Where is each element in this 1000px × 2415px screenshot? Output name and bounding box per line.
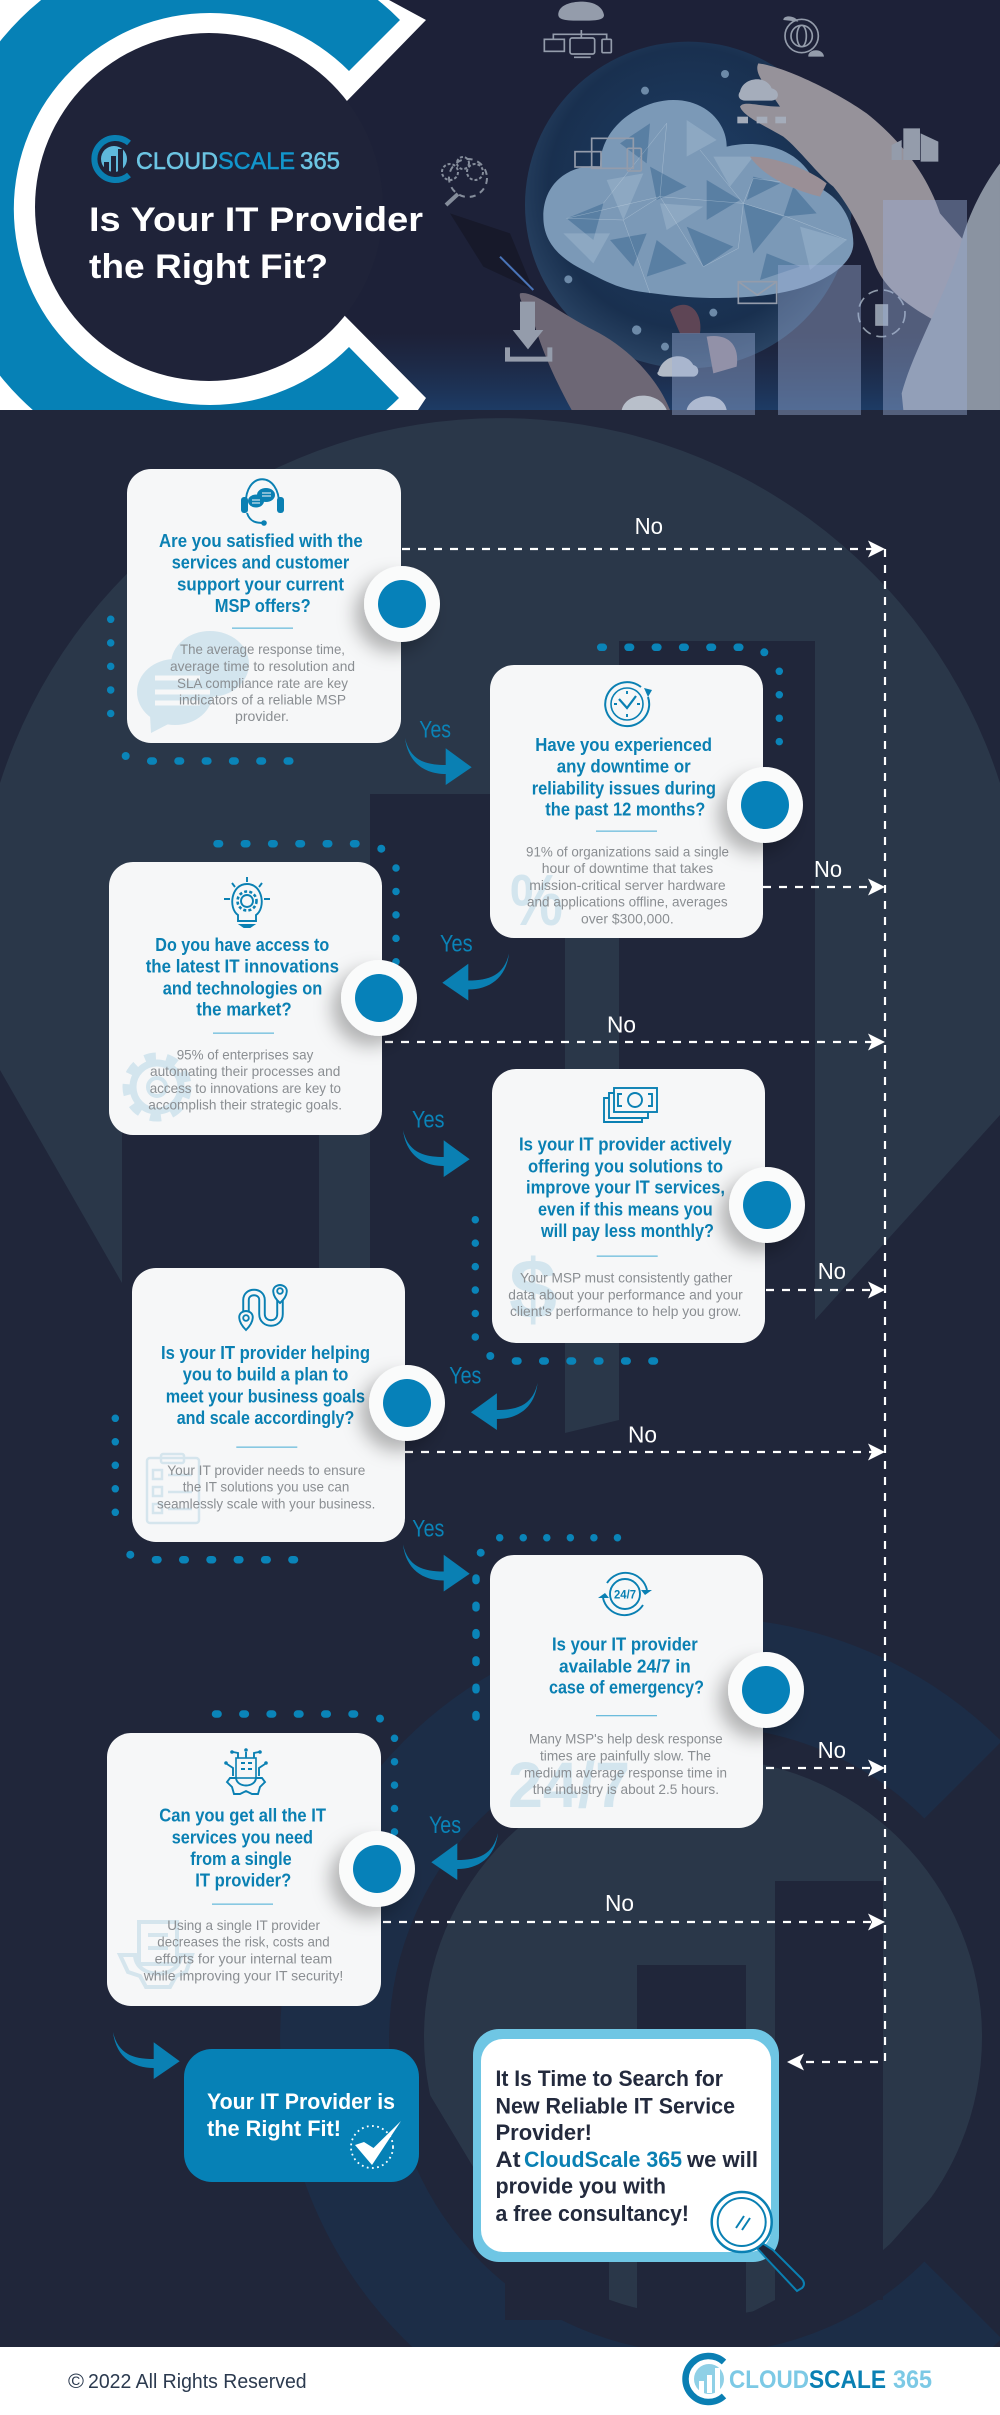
copyright: © xyxy=(68,2371,84,2393)
icon: 24/7 cycle: 24/7 xyxy=(614,1588,636,1602)
question text: IT provider? xyxy=(195,1871,291,1891)
header logo: CLOUD xyxy=(136,148,218,175)
yes arrow 4: Yes xyxy=(449,1362,481,1390)
yes arrow 5: Yes xyxy=(412,1516,444,1543)
supporting text: the IT solutions you use can xyxy=(183,1479,349,1495)
watermark icon: chat bubbles xyxy=(137,631,249,733)
outcome: search new provider: we will xyxy=(686,2147,758,2172)
decision node xyxy=(728,1652,804,1728)
question text: will pay less monthly? xyxy=(540,1221,714,1241)
no arrow 5: No xyxy=(628,1422,657,1448)
decision node xyxy=(727,767,803,843)
title xyxy=(89,201,423,286)
icon: check mark xyxy=(351,2121,401,2168)
icon: gears and magnifier xyxy=(442,157,487,205)
supporting text: accomplish their strategic goals. xyxy=(148,1097,342,1113)
dotted decoration 6 xyxy=(476,1538,618,1717)
header photo: cloud in hands xyxy=(380,2,1000,410)
panel: question 4 xyxy=(492,1069,805,1343)
icon: 24/7 cycle xyxy=(598,1573,652,1615)
panel: question 7 xyxy=(107,1733,415,2006)
question text: reliability issues during xyxy=(532,778,716,798)
supporting text: SLA compliance rate are key xyxy=(177,675,348,691)
no arrow 7: No xyxy=(605,1890,634,1916)
watermark: dollar: $ xyxy=(509,1242,557,1336)
watermark: percent: % xyxy=(510,861,563,941)
dotted decoration 5 xyxy=(115,1418,295,1560)
supporting text: medium average response time in xyxy=(524,1764,727,1780)
supporting text: and applications offline, averages xyxy=(527,894,728,910)
question text: support your current xyxy=(177,574,344,594)
question text: and technologies on xyxy=(163,978,322,998)
supporting text xyxy=(148,1046,342,1113)
copyright: 2022 All Rights Reserved xyxy=(88,2371,307,2393)
title: Is Your IT Provider xyxy=(89,201,423,239)
supporting text: Your MSP must consistently gather xyxy=(520,1270,733,1286)
header banner xyxy=(0,0,1000,410)
question text: Do you have access to xyxy=(155,935,329,955)
supporting text: while improving your IT security! xyxy=(143,1967,343,1983)
supporting text: hour of downtime that takes xyxy=(542,860,713,876)
no path: vertical dashed connector xyxy=(800,549,885,2062)
no arrow 2 xyxy=(763,856,885,896)
question text xyxy=(532,735,716,820)
supporting text: decreases the risk, costs and xyxy=(157,1934,330,1950)
outcome: right fit xyxy=(184,2049,419,2182)
question text: from a single xyxy=(190,1849,292,1869)
question text: Have you experienced xyxy=(535,735,712,755)
yes arrow 5 xyxy=(403,1516,470,1592)
question text: MSP offers? xyxy=(215,596,311,616)
yes arrow 6 xyxy=(429,1812,498,1880)
watermark icon: gear xyxy=(127,1057,187,1117)
icon: banknotes xyxy=(604,1088,657,1122)
no arrow 4: No xyxy=(818,1258,846,1284)
supporting text: seamlessly scale with your business. xyxy=(157,1496,375,1512)
question text: the past 12 months? xyxy=(545,800,705,820)
yes arrow 1 xyxy=(405,717,472,785)
supporting text xyxy=(170,641,355,724)
dotted decoration 3 xyxy=(217,844,396,962)
supporting text: indicators of a reliable MSP xyxy=(179,692,346,708)
question text: Can you get all the IT xyxy=(159,1806,326,1826)
supporting text: data about your performance and your xyxy=(508,1286,743,1302)
supporting text: over $300,000. xyxy=(581,910,674,926)
outcome: search new provider: New Reliable IT Service xyxy=(496,2093,735,2118)
question text xyxy=(159,531,363,616)
icon: clock xyxy=(605,682,652,726)
yes arrow 4 xyxy=(449,1362,538,1430)
no arrow 5 xyxy=(405,1422,885,1460)
icon: winding road xyxy=(239,1285,287,1330)
outcome: right fit: the Right Fit! xyxy=(207,2116,341,2141)
outcome: search new provider: At xyxy=(496,2147,521,2172)
supporting text xyxy=(157,1462,375,1512)
decision node xyxy=(364,566,440,642)
title: the Right Fit? xyxy=(89,248,328,286)
C shape dark interior xyxy=(35,33,347,381)
supporting text: mission-critical server hardware xyxy=(529,877,726,893)
icon: headset xyxy=(241,479,284,526)
outcome: search new provider: Provider! xyxy=(496,2120,592,2145)
question text: case of emergency? xyxy=(549,1678,704,1698)
icon: building on gear xyxy=(224,1748,268,1794)
dotted decoration 4 xyxy=(475,1220,655,1361)
question text: meet your business goals xyxy=(166,1386,365,1406)
watermark icon: building on gear xyxy=(120,1922,192,1987)
header logo: 365 xyxy=(300,148,340,175)
supporting text xyxy=(526,843,729,926)
supporting text: 91% of organizations said a single xyxy=(526,843,729,859)
outcome: right fit: Your IT Provider is xyxy=(207,2089,395,2114)
question text: offering you solutions to xyxy=(528,1156,723,1176)
question text: improve your IT services, xyxy=(526,1178,725,1198)
question text: even if this means you xyxy=(538,1199,713,1219)
supporting text: automating their processes and xyxy=(150,1063,340,1079)
supporting text: average time to resolution and xyxy=(170,658,355,674)
question text xyxy=(161,1343,370,1428)
question text: and scale accordingly? xyxy=(177,1408,354,1428)
no arrow 2: No xyxy=(814,856,842,882)
header logo: SCALE xyxy=(218,148,295,175)
outcome: search new provider: It Is Time to Search for xyxy=(496,2066,723,2091)
panel: question 5 xyxy=(132,1268,445,1542)
decision node xyxy=(339,1831,415,1907)
supporting text: Using a single IT provider xyxy=(167,1917,320,1933)
outcome: search new provider: CloudScale 365 xyxy=(524,2147,682,2172)
supporting text: times are painfully slow. The xyxy=(540,1748,711,1764)
outcome: search new provider: a free consultancy! xyxy=(496,2201,689,2226)
no arrow 3: No xyxy=(607,1012,636,1038)
arrow to right fit box xyxy=(113,2032,180,2079)
supporting text: access to innovations are key to xyxy=(150,1080,341,1096)
supporting text: Your IT provider needs to ensure xyxy=(167,1462,365,1478)
watermark icon: clipboard xyxy=(147,1454,199,1523)
supporting text xyxy=(143,1917,343,1983)
C shape blue band xyxy=(0,0,400,410)
supporting text: the industry is about 2.5 hours. xyxy=(533,1781,719,1797)
question text: Are you satisfied with the xyxy=(159,531,363,551)
footer xyxy=(0,2347,1000,2415)
dotted decoration 7 xyxy=(216,1714,394,1832)
dotted decoration 2 xyxy=(601,647,779,765)
icon: lightbulb gear xyxy=(224,877,270,927)
panel: question 1 xyxy=(127,469,440,743)
no arrow 6: No xyxy=(818,1737,846,1763)
no arrow 3 xyxy=(385,1012,885,1050)
question text: Is your IT provider helping xyxy=(161,1343,370,1363)
supporting text: The average response time, xyxy=(180,641,345,657)
no arrow 1: No xyxy=(635,513,663,539)
yes arrow 2: Yes xyxy=(440,931,473,958)
outcome: search new provider xyxy=(473,2029,804,2291)
supporting text: client's performance to help you grow. xyxy=(510,1303,741,1319)
question text: services you need xyxy=(172,1827,313,1847)
question text xyxy=(159,1806,326,1891)
question text: Is your IT provider xyxy=(552,1635,698,1655)
yes arrow 6: Yes xyxy=(429,1812,461,1839)
no arrow 1 xyxy=(402,513,885,558)
outcome: search new provider: provide you with xyxy=(496,2174,666,2199)
decision node xyxy=(341,960,417,1036)
decision node xyxy=(369,1365,445,1441)
watermark: 24/7: 24/7 xyxy=(508,1749,630,1821)
no arrow 7 xyxy=(383,1890,885,1930)
question text: the market? xyxy=(196,1000,292,1020)
header bar chart overlay xyxy=(672,200,967,415)
footer logo xyxy=(686,2356,932,2402)
supporting text xyxy=(524,1731,727,1797)
footer logo: CLOUD xyxy=(729,2366,809,2394)
dotted decoration 1 xyxy=(111,619,290,761)
question text xyxy=(519,1135,732,1241)
supporting text: efforts for your internal team xyxy=(155,1951,332,1967)
panel: question 3 xyxy=(109,862,417,1135)
supporting text: Many MSP's help desk response xyxy=(529,1731,723,1747)
question text: services and customer xyxy=(172,553,349,573)
question text: Is your IT provider actively xyxy=(519,1135,732,1155)
question text: you to build a plan to xyxy=(183,1365,348,1385)
supporting text: 95% of enterprises say xyxy=(177,1046,313,1062)
no arrow 6 xyxy=(766,1737,885,1776)
question text: available 24/7 in xyxy=(559,1656,691,1676)
yes arrow 2 xyxy=(440,931,509,1000)
question text xyxy=(549,1635,704,1698)
decision node xyxy=(729,1167,805,1243)
footer logo: SCALE xyxy=(809,2366,886,2394)
no arrow 4 xyxy=(766,1258,885,1298)
yes arrow 3: Yes xyxy=(412,1107,444,1134)
yes arrow 1: Yes xyxy=(419,717,451,744)
panel: question 6 xyxy=(490,1555,804,1828)
footer logo: 365 xyxy=(893,2366,932,2394)
icon: magnifier xyxy=(712,2192,804,2291)
panel: question 2 xyxy=(490,665,803,941)
header logo xyxy=(94,138,340,180)
question text: any downtime or xyxy=(557,757,691,777)
yes arrow 3 xyxy=(403,1107,470,1177)
question text: the latest IT innovations xyxy=(146,957,339,977)
supporting text: provider. xyxy=(235,708,289,724)
arrow into search box xyxy=(787,2054,804,2070)
C shape white band xyxy=(0,0,426,410)
supporting text xyxy=(508,1270,743,1319)
question text xyxy=(146,935,339,1020)
